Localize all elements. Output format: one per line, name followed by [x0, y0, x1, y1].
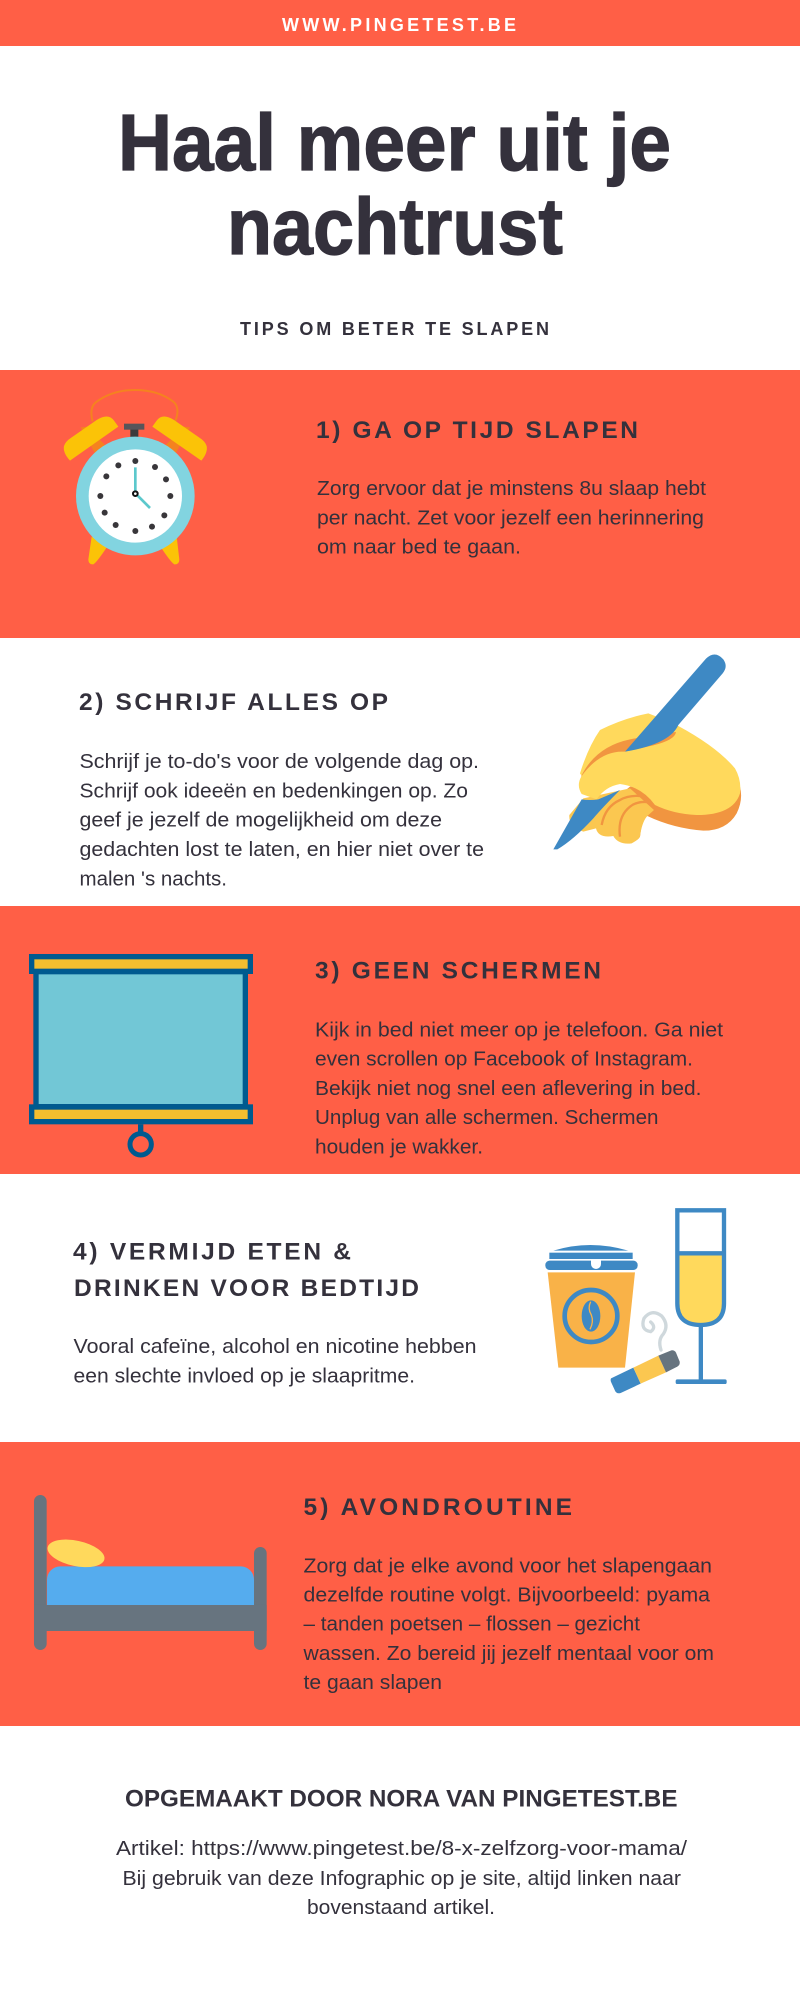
panel: tip 2 [79, 654, 741, 890]
body text: per nacht. Zet voor jezelf een herinnering [317, 508, 704, 530]
body text [317, 478, 706, 558]
subtitle: TIPS OM BETER TE SLAPEN [240, 319, 549, 339]
footer text: Bij gebruik van deze Infographic op je site, altijd linken naar [122, 1868, 681, 1890]
icon: projection screen [32, 957, 250, 1155]
panel: tip 1 [0, 370, 800, 638]
title [118, 98, 671, 271]
coffee cup [545, 1245, 638, 1368]
body text: wassen. Zo bereid jij jezelf mentaal voor om [302, 1643, 714, 1665]
heading: 5) AVONDROUTINE [304, 1494, 572, 1521]
footer heading: OPGEMAAKT DOOR NORA VAN PINGETEST.BE [125, 1786, 678, 1812]
footer text [116, 1838, 687, 1919]
body text: Bekijk niet nog snel een aflevering in bed. [315, 1078, 702, 1100]
body text [80, 751, 484, 890]
title: nachtrust [227, 182, 563, 271]
body text: Schrijf ook ideeën en bedenkingen op. Zo [80, 780, 468, 802]
body text: Unplug van alle schermen. Schermen [315, 1107, 658, 1129]
cigarette [611, 1350, 680, 1393]
heading: 2) SCHRIJF ALLES OP [79, 689, 388, 716]
body text: Zorg ervoor dat je minstens 8u slaap hebt [317, 478, 706, 500]
body text: malen 's nachts. [80, 868, 227, 890]
body text: even scrollen op Facebook of Instagram. [315, 1048, 693, 1070]
icon: bed [34, 1495, 267, 1650]
heading: 1) GA OP TIJD SLAPEN [316, 417, 638, 444]
body text: Schrijf je to-do's voor de volgende dag op. [80, 751, 479, 773]
body text: – tanden poetsen – flossen – gezicht [304, 1614, 640, 1636]
icon: alarm clock [64, 390, 207, 564]
heading: 3) GEEN SCHERMEN [315, 958, 601, 984]
top banner: WWW.PINGETEST.BE [282, 15, 516, 35]
panel: tip 3 [0, 906, 800, 1174]
body text [74, 1336, 476, 1388]
icon: writing hand [553, 654, 741, 849]
title: Haal meer uit je [118, 98, 671, 187]
body text: te gaan slapen [304, 1672, 442, 1694]
footer [116, 1786, 687, 1919]
body text: Kijk in bed niet meer op je telefoon. Ga niet [315, 1020, 723, 1042]
heading [73, 1238, 419, 1302]
panel: tip 4 [73, 1210, 727, 1393]
champagne glass [676, 1210, 727, 1384]
panel: tip 5 [0, 1442, 800, 1726]
body text: houden je wakker. [315, 1136, 483, 1158]
body text: Vooral cafeïne, alcohol en nicotine hebben [74, 1336, 476, 1358]
body text: Zorg dat je elke avond voor het slapengaan [304, 1556, 712, 1578]
body text: geef je jezelf de mogelijkheid om deze [80, 810, 442, 832]
footer text: bovenstaand artikel. [307, 1897, 495, 1919]
smoke [643, 1313, 666, 1350]
body text [302, 1556, 714, 1694]
body text: om naar bed te gaan. [317, 536, 521, 558]
body text [315, 1020, 723, 1158]
body text: gedachten lost te laten, en hier niet over te [80, 839, 484, 861]
footer text: Artikel: https://www.pingetest.be/8-x-zelfzorg-voor-mama/ [116, 1838, 687, 1860]
icon: coffee, cigarette and champagne [545, 1210, 727, 1393]
heading: DRINKEN VOOR BEDTIJD [74, 1275, 419, 1302]
heading: 4) VERMIJD ETEN & [73, 1238, 351, 1266]
body text: een slechte invloed op je slaapritme. [74, 1366, 415, 1388]
body text: dezelfde routine volgt. Bijvoorbeeld: pyama [304, 1584, 711, 1606]
top banner [0, 0, 800, 46]
